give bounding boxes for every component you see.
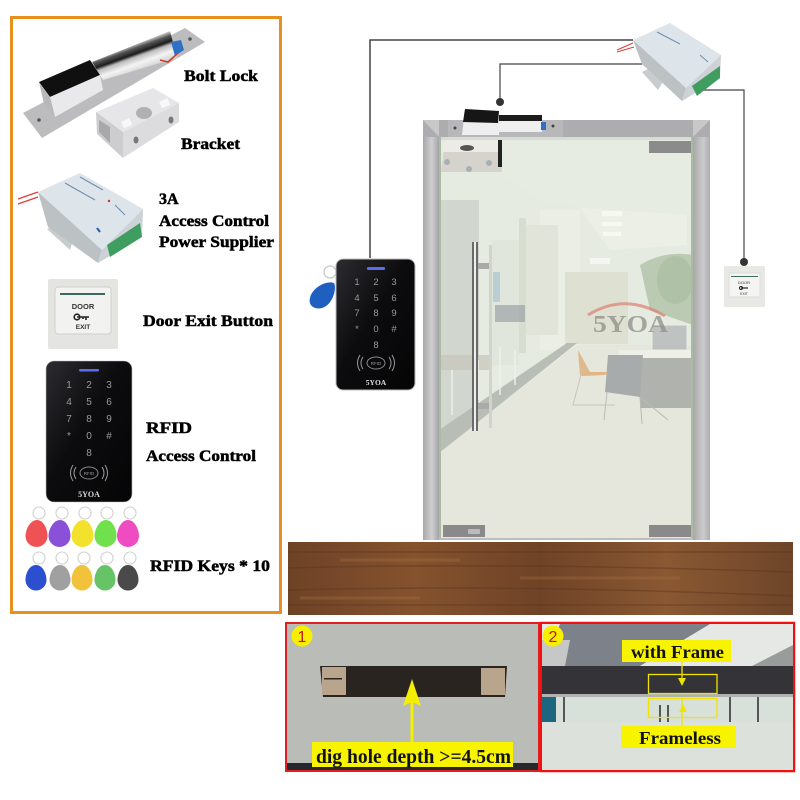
icon: wall-mounted RFID keypad: * [355, 324, 359, 335]
icon: wall-mounted RFID keypad: 6 [391, 293, 397, 304]
icon: bolt lock [23, 28, 205, 138]
top right hinge [649, 141, 691, 153]
icon: wall-mounted RFID keypad: 2 [373, 277, 379, 288]
arrow heads [678, 678, 687, 712]
door with glass [423, 109, 710, 540]
callout: frameless: Frameless [639, 728, 721, 748]
panel: parts list [12, 18, 280, 612]
icon: wall-mounted RFID keypad: 9 [391, 308, 397, 319]
label: exit button: Door Exit Button [143, 313, 273, 330]
icon: RFID keypad [46, 361, 132, 502]
label: power supply [159, 191, 274, 251]
wiring lines [370, 40, 748, 266]
callout: with frame: with Frame [631, 642, 724, 662]
badge 1: 1 [298, 629, 307, 646]
watermark logo: 5YOA [593, 312, 669, 338]
icon: RFID keypad: 7 [66, 414, 72, 425]
badge 1 [292, 626, 312, 646]
badge 2: 2 [549, 629, 558, 646]
icon: RFID keypad: * [67, 431, 71, 442]
icon: RFID keypad: 8 [86, 448, 92, 459]
icon: exit button: DOOR [72, 302, 95, 311]
icon: power supply [18, 173, 143, 263]
icon: RFID keypad: 1 [66, 380, 72, 391]
icon: wall-mounted RFID keypad: 5YOA [366, 378, 387, 387]
icon: wall-mounted RFID keypad: RFID [371, 361, 382, 366]
icon: wall-mounted exit button: EXIT [740, 292, 749, 296]
icon: wall-mounted exit button: DOOR [738, 280, 750, 285]
icon: RFID keypad: 5 [86, 397, 92, 408]
icon: RFID keypad: 0 [86, 431, 92, 442]
icon: wall-mounted RFID keypad: 8 [373, 308, 379, 319]
with frame and frameless markers [648, 662, 717, 726]
badge 2 [542, 626, 564, 646]
door frame [423, 120, 710, 540]
label: RFID keys: RFID Keys * 10 [150, 558, 270, 575]
watermark logo [588, 304, 669, 338]
icon: wall-mounted RFID keypad [336, 259, 415, 390]
label: bolt lock: Bolt Lock [184, 68, 258, 85]
icon: exit button: EXIT [76, 324, 90, 331]
label: bracket: Bracket [181, 136, 241, 153]
icon: wall-mounted RFID keypad: 5 [373, 293, 379, 304]
icon: wall-mounted RFID keypad: 8 [373, 340, 379, 351]
icon: wall-mounted RFID keypad: 3 [391, 277, 397, 288]
callout: hole depth: dig hole depth >=4.5cm [316, 746, 511, 768]
label: RFID access control: RFID [146, 420, 192, 437]
icon: wall-mounted exit button [724, 266, 765, 307]
icon: wall-mounted RFID keypad: 1 [354, 277, 360, 288]
icon: RFID keypad: 6 [106, 397, 112, 408]
label: RFID access control: Access Control [146, 448, 257, 465]
icon: RFID keypad: 3 [106, 380, 112, 391]
icon: RFID keypad: 8 [86, 414, 92, 425]
icon: exit button [48, 279, 118, 349]
icon: mounted bolt lock [448, 109, 563, 137]
callout: frameless [621, 726, 736, 748]
glass door interior [439, 137, 693, 538]
icon: RFID keypad: # [106, 431, 112, 442]
icon: RFID key fobs [26, 507, 139, 590]
icon: RFID key fob beside reader [310, 266, 336, 308]
panel: step 1 dig hole [286, 623, 539, 771]
icon: RFID keypad: 9 [106, 414, 112, 425]
label: power supply: Access Control [159, 213, 270, 230]
icon: RFID keypad: RFID [84, 471, 95, 476]
bottom hinges [443, 525, 691, 537]
icon: wall-mounted RFID keypad: 0 [373, 324, 379, 335]
label: RFID access control [146, 420, 257, 465]
icon: wall-mounted RFID keypad: # [391, 324, 397, 335]
panel: step 2 frame options [541, 623, 794, 771]
icon: RFID keypad: 4 [66, 397, 72, 408]
icon: power supply installed [617, 23, 721, 101]
icon: RFID keypad: 2 [86, 380, 92, 391]
hole in door frame [320, 666, 507, 697]
arrow [403, 679, 421, 742]
icon: wall-mounted RFID keypad: 4 [354, 293, 360, 304]
label: power supply: 3A [159, 191, 179, 208]
icon: bracket [96, 88, 179, 158]
icon: mounted bracket [441, 140, 502, 172]
floor: wood [288, 542, 793, 615]
label: power supply: Power Supplier [159, 234, 274, 251]
background photo [542, 624, 793, 770]
icon: wall-mounted RFID keypad: 7 [354, 308, 360, 319]
icon: RFID keypad: 5YOA [78, 490, 100, 499]
door pull handle [472, 242, 492, 431]
